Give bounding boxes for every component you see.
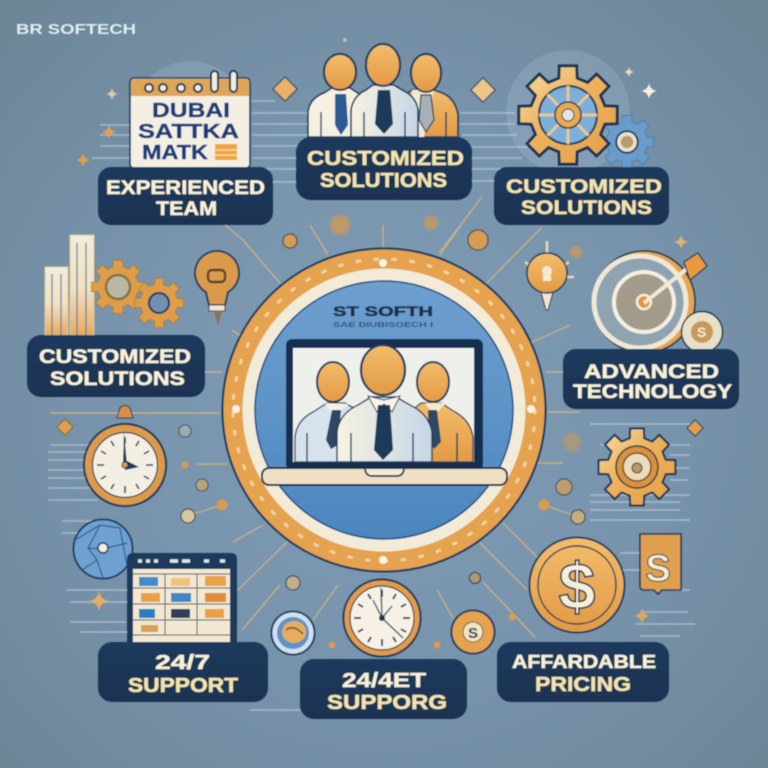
icon: small coin: [452, 610, 494, 654]
icon: two gears: [91, 260, 184, 328]
label: 24/4ET support: SUPPORG: [327, 692, 447, 714]
label: 24/4ET support: [300, 659, 467, 719]
badge: dotted lights: [233, 259, 535, 561]
icon: small coin near target: [682, 312, 722, 352]
icon: small coin: S: [468, 625, 478, 642]
icon: dashboard panel: [127, 553, 237, 643]
icon: calendar: MATK: [142, 142, 209, 164]
label: customized solutions centre: CUSTOMIZED: [307, 148, 464, 170]
label: affordable pricing: [497, 642, 669, 702]
laptop base: [262, 468, 507, 485]
badge: cardinal lights: [232, 259, 535, 564]
icon: team of three: [308, 44, 458, 137]
icon: dollar tag: S: [645, 548, 671, 590]
icon: second light bulb: [525, 241, 574, 310]
icon: large dollar coin: [530, 538, 624, 632]
right person: [400, 54, 458, 137]
small sparkles and diamonds: [57, 37, 703, 624]
calendar text: DUBAI: [152, 100, 230, 122]
icon: large gear: [519, 66, 617, 164]
laptop: left person: [295, 362, 375, 462]
label: experienced team: EXPERIENCED: [106, 178, 265, 199]
label: affordable pricing: AFFARDABLE: [512, 652, 656, 672]
badge: heading: ST SOFTH: [333, 303, 433, 319]
label: customized solutions left: SOLUTIONS: [50, 369, 185, 390]
laptop: centre person: [337, 345, 432, 462]
icon: calendar: [130, 71, 250, 168]
label: customized solutions left: [27, 335, 205, 397]
icon: target with arrow: [593, 251, 707, 353]
icon: small coin near target: S: [697, 324, 706, 340]
icon: bar chart: [45, 235, 94, 335]
laptop screen: [286, 339, 483, 470]
label: customized solutions right: SOLUTIONS: [521, 198, 652, 219]
label: advanced technology: [563, 349, 739, 409]
label: 24/7 support: SUPPORT: [128, 675, 238, 697]
badge: subheading: SAE DIUBISOECH I: [333, 320, 433, 329]
calendar card: [215, 144, 237, 160]
left person: [308, 54, 368, 137]
soft halos behind icons: [133, 50, 630, 175]
central badge: [222, 248, 546, 572]
label: experienced team: TEAM: [156, 199, 217, 220]
icon: blue small gear: [600, 115, 654, 169]
radiating connector lines: [50, 197, 600, 637]
icon: large dollar coin: $: [559, 549, 595, 623]
icon: gear lower right: [599, 429, 675, 505]
icon: light bulb: [195, 251, 239, 326]
brand name: BR SOFTECH: [16, 22, 136, 38]
label: affordable pricing: PRICING: [535, 674, 631, 696]
label: 24/4ET support: 24/4ET: [342, 670, 426, 692]
centre person: [351, 44, 418, 137]
icon: wall clock: [344, 580, 420, 656]
label: 24/7 support: 24/7: [155, 652, 210, 674]
blurred gold motes: [330, 215, 582, 451]
laptop: right person: [400, 362, 473, 462]
icon: calendar: SATTKA: [138, 121, 239, 143]
label: advanced technology: TECHNOLOGY: [573, 382, 732, 403]
label: customized solutions left: CUSTOMIZED: [39, 347, 191, 368]
icon: globe: [74, 520, 132, 578]
small coin tokens: [179, 230, 585, 648]
label: customized solutions centre: [296, 137, 472, 200]
label: experienced team: [98, 167, 273, 225]
badge: blue disc: [255, 281, 513, 539]
label: 24/7 support: [98, 642, 268, 702]
label: advanced technology: ADVANCED: [584, 362, 719, 383]
label: customized solutions right: CUSTOMIZED: [506, 177, 662, 198]
icon: stopwatch: [84, 406, 166, 506]
badge: gold ring: [222, 248, 546, 572]
label: customized solutions right: [494, 167, 669, 225]
label: customized solutions centre: SOLUTIONS: [320, 170, 447, 192]
icon: small emblem: [272, 612, 314, 654]
icon: dollar tag: [640, 534, 681, 594]
badge: cream ring: [242, 268, 526, 552]
